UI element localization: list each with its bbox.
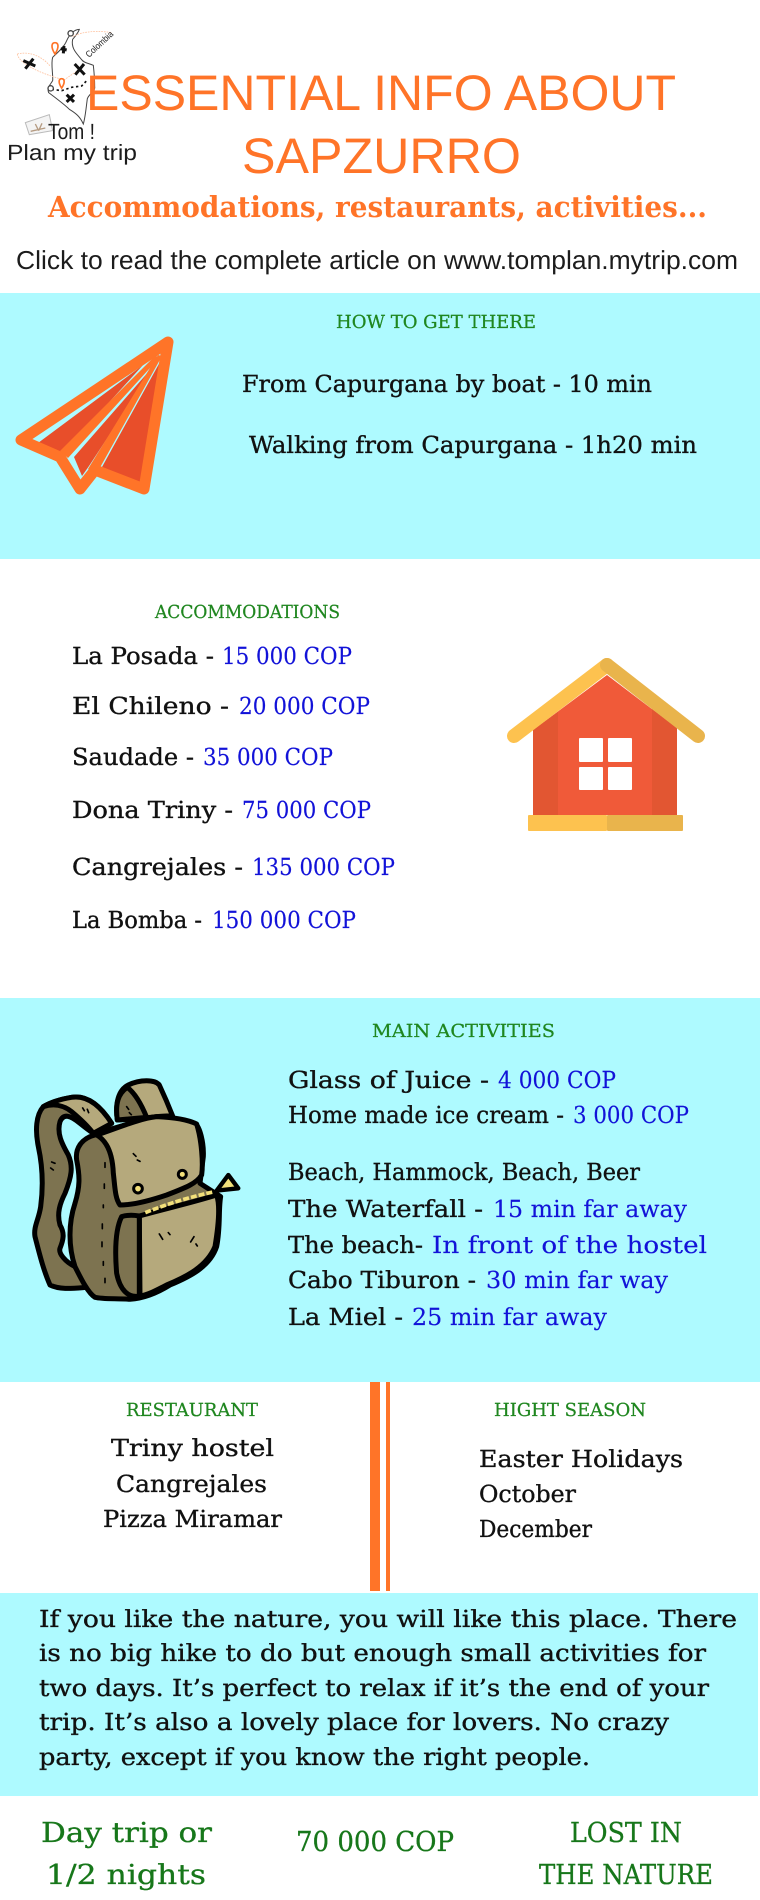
price: La Posada: 15 000 COP xyxy=(222,642,352,670)
item: the beach: In front of the hostel xyxy=(432,1231,707,1259)
season: December: December xyxy=(479,1515,593,1543)
paragraph text xyxy=(39,1605,737,1771)
item: waterfall: The Waterfall - xyxy=(288,1195,483,1223)
paragraph text: trip. It’s also a lovely place for lovers. No crazy xyxy=(39,1708,670,1736)
paragraph text: party, except if you know the right people. xyxy=(39,1743,590,1771)
paragraph text: If you like the nature, you will like this place. There xyxy=(39,1605,737,1633)
title xyxy=(86,65,676,184)
icon: house xyxy=(514,665,698,831)
heading: accommodations: ACCOMMODATIONS xyxy=(154,602,340,623)
item: glass of juice xyxy=(288,1066,616,1094)
price: La Bomba xyxy=(72,906,356,934)
panel: high season xyxy=(479,1400,683,1543)
price: La Posada: La Posada - xyxy=(72,642,214,670)
footer stat: trip length: Day trip or xyxy=(41,1817,213,1849)
item: La Miel: 25 min far away xyxy=(412,1303,608,1331)
footer stat: slogan: LOST IN xyxy=(570,1817,682,1849)
footer stat: trip length xyxy=(41,1817,213,1891)
heading: hight season: HIGHT SEASON xyxy=(494,1400,646,1421)
article link line: Click to read the complete article on www.tomplan.mytrip.com xyxy=(16,245,738,275)
item: ice cream: 3 000 COP xyxy=(573,1101,689,1129)
item: the beach xyxy=(288,1231,707,1259)
small rotated country label: Colombia xyxy=(84,29,115,59)
footer stat: budget: 70 000 COP xyxy=(296,1826,454,1858)
price: El Chileno: 20 000 COP xyxy=(239,692,370,720)
map of Colombia with pins and planes xyxy=(17,29,112,135)
restaurant: Cangrejales: Cangrejales xyxy=(116,1470,267,1498)
item: glass of juice: 4 000 COP xyxy=(498,1066,616,1094)
price: Cangrejales xyxy=(72,853,395,881)
heading: main activities: MAIN ACTIVITIES xyxy=(372,1021,555,1042)
restaurant: Triny hostel: Triny hostel xyxy=(111,1434,274,1462)
restaurant: Pizza Miramar: Pizza Miramar xyxy=(103,1505,283,1533)
logo text line 1: Tom ! xyxy=(48,119,95,144)
subtitle: Accommodations, restaurants, activities... xyxy=(47,190,707,224)
item: beach and beer: Beach, Hammock, Beach, Beer xyxy=(288,1158,641,1186)
logo: Tom Plan my trip xyxy=(7,29,137,165)
paragraph text: two days. It’s perfect to relax if it’s the end of your xyxy=(39,1674,710,1702)
paragraph text: is no big hike to do but enough small activities for xyxy=(39,1639,707,1667)
price: El Chileno: El Chileno - xyxy=(72,692,229,720)
season: Easter: Easter Holidays xyxy=(479,1445,683,1473)
boat time: From Capurgana by boat - 10 min xyxy=(242,370,652,398)
logo text line 2: Plan my trip xyxy=(7,140,137,165)
price: El Chileno xyxy=(72,692,370,720)
walking time: Walking from Capurgana - 1h20 min xyxy=(249,431,697,459)
icon: paper airplane xyxy=(21,342,168,489)
footer stat: slogan xyxy=(539,1817,713,1891)
title: ESSENTIAL INFO ABOUT xyxy=(86,65,676,121)
item: ice cream: Home made ice cream - xyxy=(288,1101,564,1129)
divider: double orange bar xyxy=(370,1382,390,1591)
price: Cangrejales: 135 000 COP xyxy=(252,853,395,881)
price: Dona Triny xyxy=(72,796,371,824)
panel: restaurant xyxy=(103,1400,283,1533)
item: La Miel: La Miel - xyxy=(288,1303,403,1331)
panel: main activities xyxy=(0,998,760,1382)
season: October: October xyxy=(479,1480,577,1508)
item: Cabo Tiburon: 30 min far way xyxy=(486,1266,669,1294)
item: waterfall: 15 min far away xyxy=(493,1195,688,1223)
heading: restaurant: RESTAURANT xyxy=(126,1400,258,1421)
price: La Bomba: La Bomba - xyxy=(72,906,202,934)
price: Cangrejales: Cangrejales - xyxy=(72,853,243,881)
price: La Bomba: 150 000 COP xyxy=(212,906,356,934)
price: Saudade: Saudade - xyxy=(72,743,194,771)
title: SAPZURRO xyxy=(242,128,521,184)
price: La Posada xyxy=(72,642,352,670)
item: Cabo Tiburon: Cabo Tiburon - xyxy=(288,1266,476,1294)
price: Dona Triny: 75 000 COP xyxy=(242,796,371,824)
price: Saudade: 35 000 COP xyxy=(203,743,333,771)
item: Cabo Tiburon xyxy=(288,1266,669,1294)
panel: summary paragraph xyxy=(0,1593,758,1796)
item: La Miel xyxy=(288,1303,608,1331)
panel: how to get there xyxy=(0,293,760,559)
heading: how to get there: HOW TO GET THERE xyxy=(336,312,536,333)
price: Dona Triny: Dona Triny - xyxy=(72,796,233,824)
panel: accommodations xyxy=(72,602,698,934)
item: glass of juice: Glass of Juice - xyxy=(288,1066,489,1094)
footer stat: slogan: THE NATURE xyxy=(539,1859,713,1891)
item: the beach: The beach- xyxy=(288,1231,423,1259)
price: Saudade xyxy=(72,743,333,771)
item: waterfall xyxy=(288,1195,688,1223)
footer stat: trip length: 1/2 nights xyxy=(46,1859,206,1891)
icon: backpack xyxy=(35,1081,238,1299)
